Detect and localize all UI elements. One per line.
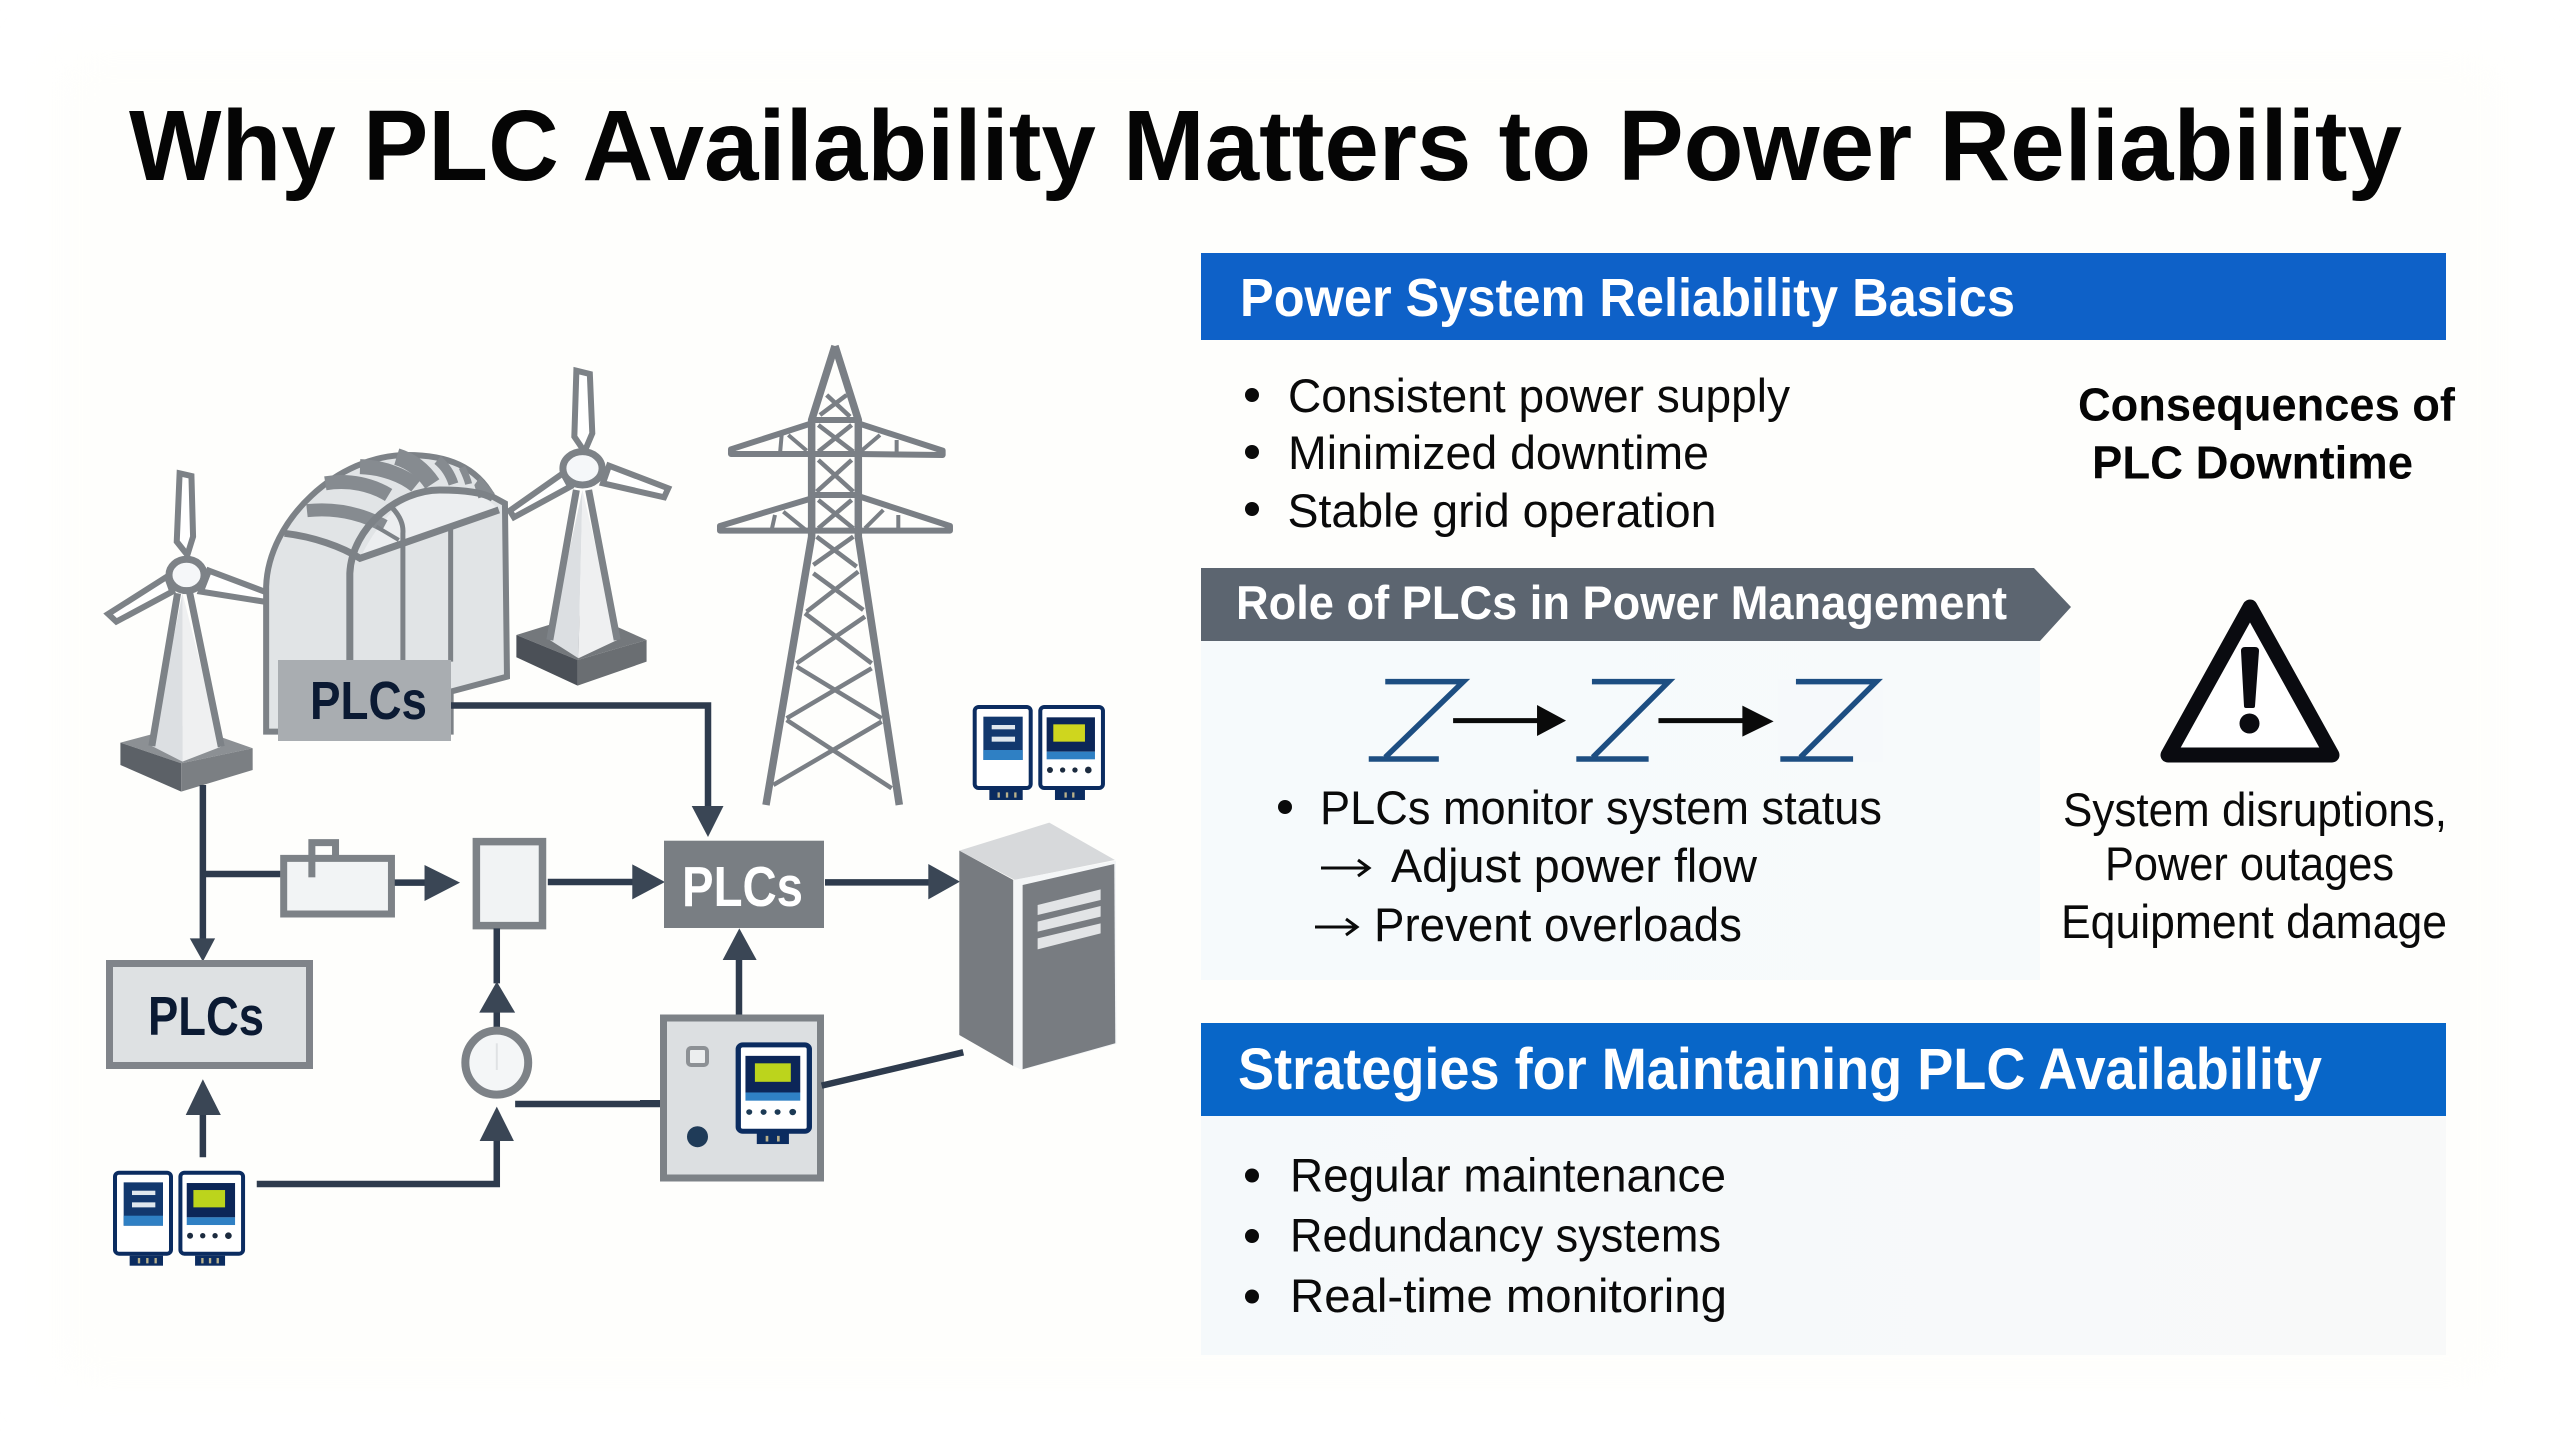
heading: consequences of PLC downtime: Consequences of: [2078, 378, 2456, 430]
text block: reliability bullets: Consistent power supply: [1288, 369, 1790, 422]
text block: role of PLCs bullets: [1278, 781, 1882, 951]
icon: breaker box: [284, 843, 391, 914]
arrow: switch to central PLCs: [548, 864, 665, 899]
heading: role of PLCs in power management: [1201, 568, 2071, 641]
arrow: building PLCs to central PLCs: [451, 706, 724, 837]
heading: role of PLCs in power management: Role of PLCs in Power Management: [1236, 576, 2007, 629]
icon: control units top right: [975, 707, 1103, 800]
connector: cabinet to meter line and server: [640, 1052, 963, 1103]
text block: consequences list: System disruptions,: [2063, 783, 2447, 836]
icon: control units bottom left: [115, 1173, 243, 1266]
icon: left wind turbine: [108, 473, 274, 792]
icon: server: [959, 823, 1117, 1070]
box: PLCs left: PLCs: [148, 985, 264, 1047]
text block: reliability bullets: Minimized downtime: [1288, 426, 1709, 479]
heading: power system reliability basics: Power System Reliability Basics: [1240, 268, 2015, 328]
text block: reliability bullets: [1245, 369, 1790, 537]
icon: warning triangle: [2168, 607, 2332, 755]
text block: role of PLCs bullets: Adjust power flow: [1391, 839, 1758, 892]
heading: strategies for maintaining PLC availability: [1201, 1023, 2446, 1116]
text block: strategies bullets: Redundancy systems: [1290, 1208, 1721, 1262]
text block: consequences list: [2061, 783, 2447, 948]
icon: meter circle: [465, 1031, 528, 1095]
box: central PLCs: PLCs: [682, 855, 803, 919]
box: PLCs on building: PLCs: [310, 671, 427, 731]
text block: strategies bullets: [1245, 1148, 1727, 1322]
box: central PLCs: [664, 841, 824, 928]
heading: consequences of PLC downtime: [2078, 378, 2456, 488]
text block: reliability bullets: Stable grid operation: [1288, 484, 1716, 537]
heading: consequences of PLC downtime: PLC Downtime: [2092, 436, 2413, 488]
arrow: turbine feed down to PLCs: [190, 785, 280, 962]
icon: switch box: [476, 842, 542, 926]
icon: right wind turbine: [510, 371, 668, 686]
panel: control cabinet: [664, 1018, 820, 1178]
text block: strategies bullets: Regular maintenance: [1290, 1148, 1726, 1202]
panel: power system diagram: [108, 346, 1117, 1266]
arrow: breaker to switch: [395, 865, 460, 901]
panel: role of PLCs background: [1201, 641, 2040, 980]
text block: consequences list: Power outages: [2105, 837, 2394, 890]
arrow: control panel up to central PLCs: [723, 928, 757, 1016]
panel: strategies background: [1201, 1115, 2446, 1355]
icon: process flow of three Z symbols with arrows: [1369, 679, 1883, 762]
arrow: control units up to PLCs: [186, 1079, 221, 1157]
arrow: central PLCs to server: [825, 864, 960, 899]
text block: role of PLCs bullets: PLCs monitor system status: [1320, 781, 1882, 834]
arrow: control units to meter: [257, 1104, 660, 1184]
box: PLCs on building: [278, 660, 451, 741]
text block: strategies bullets: Real-time monitoring: [1290, 1269, 1727, 1322]
text block: consequences list: Equipment damage: [2061, 895, 2447, 948]
icon: turbine hall building: [266, 455, 507, 732]
heading: strategies for maintaining PLC availability: Strategies for Maintaining PLC Availability: [1238, 1037, 2322, 1102]
icon: transmission tower: [720, 346, 950, 805]
title: Why PLC Availability Matters to Power Reliability: [129, 90, 2402, 202]
text block: role of PLCs bullets: Prevent overloads: [1374, 898, 1742, 951]
heading: power system reliability basics: [1201, 253, 2446, 340]
arrow: meter up to switch: [479, 928, 515, 1031]
box: PLCs left: [110, 964, 310, 1066]
